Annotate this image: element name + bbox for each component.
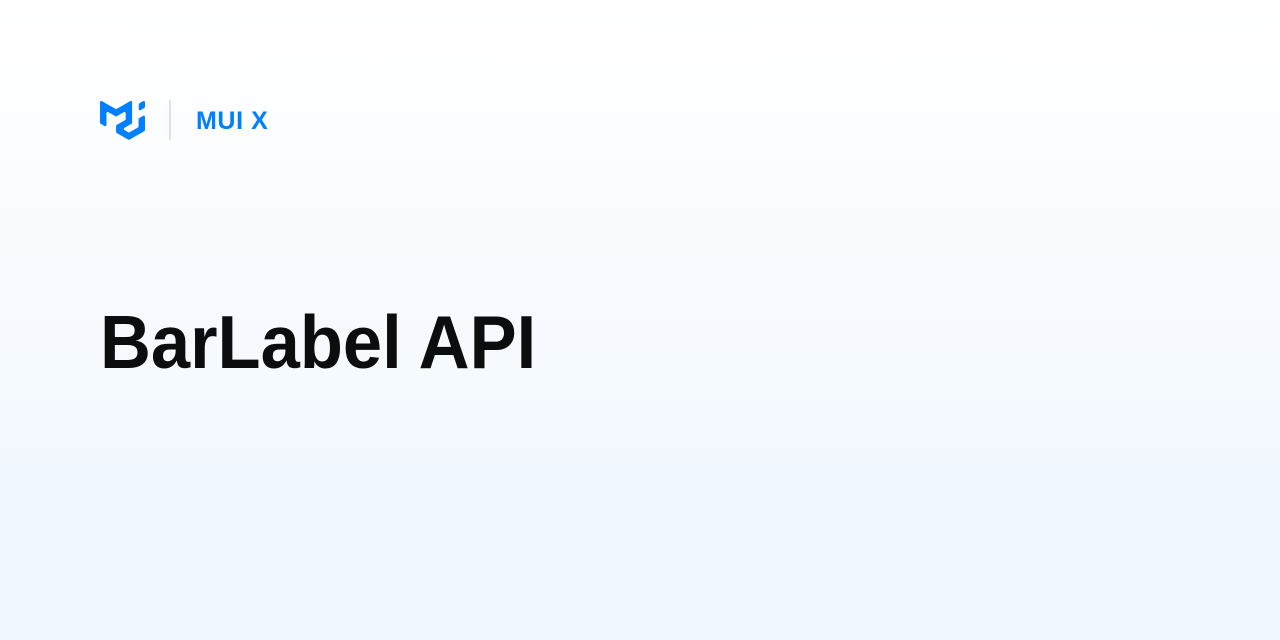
title: BarLabel API — [100, 300, 536, 384]
header: logo and product name — [100, 100, 268, 140]
icon: MUI logo — [100, 100, 145, 140]
product name: MUI X — [196, 107, 268, 135]
